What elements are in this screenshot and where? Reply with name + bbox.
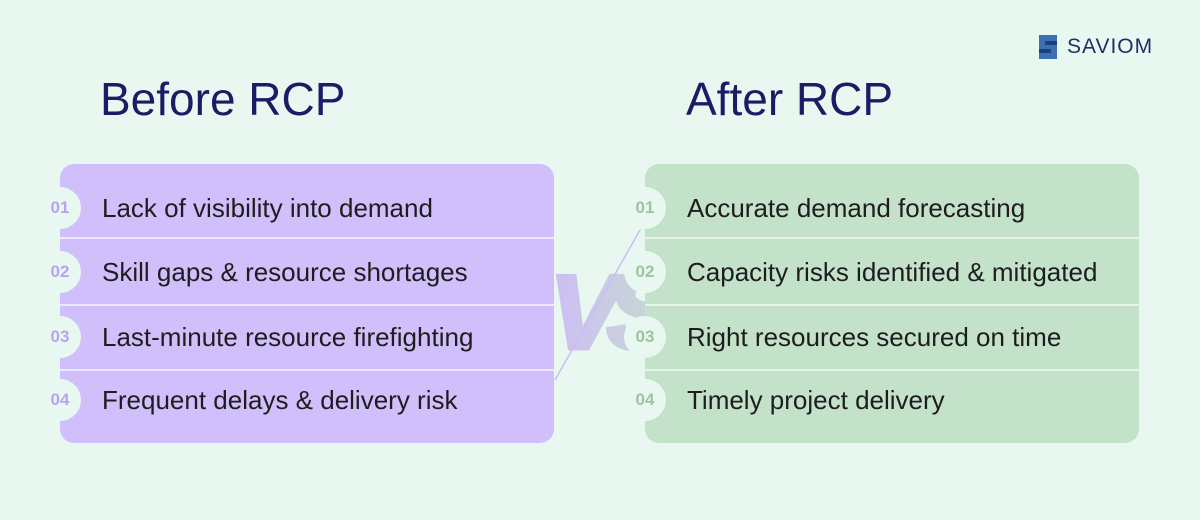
text: 01 <box>636 198 654 217</box>
row 04 <box>51 379 458 421</box>
row 01: Lack of visibility into demand <box>102 192 433 222</box>
row 04: Timely project delivery <box>687 384 945 414</box>
row 02: Capacity risks identified & mitigated <box>687 256 1097 286</box>
text: 03 <box>636 327 654 346</box>
row 01: Accurate demand forecasting <box>687 192 1025 222</box>
text: 02 <box>51 262 69 281</box>
panel: before <box>60 164 554 443</box>
text: 02 <box>636 262 654 281</box>
row 04: Frequent delays & delivery risk <box>102 384 457 414</box>
title: after: After RCP <box>686 73 893 125</box>
text: 04 <box>51 390 69 409</box>
row 03: Last-minute resource firefighting <box>102 322 473 352</box>
row 02 <box>624 251 1097 293</box>
row 02 <box>51 251 468 293</box>
text: 04 <box>636 390 654 409</box>
row 04 <box>636 379 945 421</box>
text: 01 <box>51 198 69 217</box>
logo: saviom: SAVIOM <box>1067 35 1153 58</box>
title: before: Before RCP <box>100 73 345 125</box>
row 03 <box>51 316 473 358</box>
row 01 <box>51 187 433 229</box>
row 02: Skill gaps & resource shortages <box>102 256 468 286</box>
panel: after <box>645 164 1139 443</box>
row 03: Right resources secured on time <box>687 322 1061 352</box>
row 03 <box>624 316 1061 358</box>
text: 03 <box>51 327 69 346</box>
row 01 <box>636 187 1025 229</box>
